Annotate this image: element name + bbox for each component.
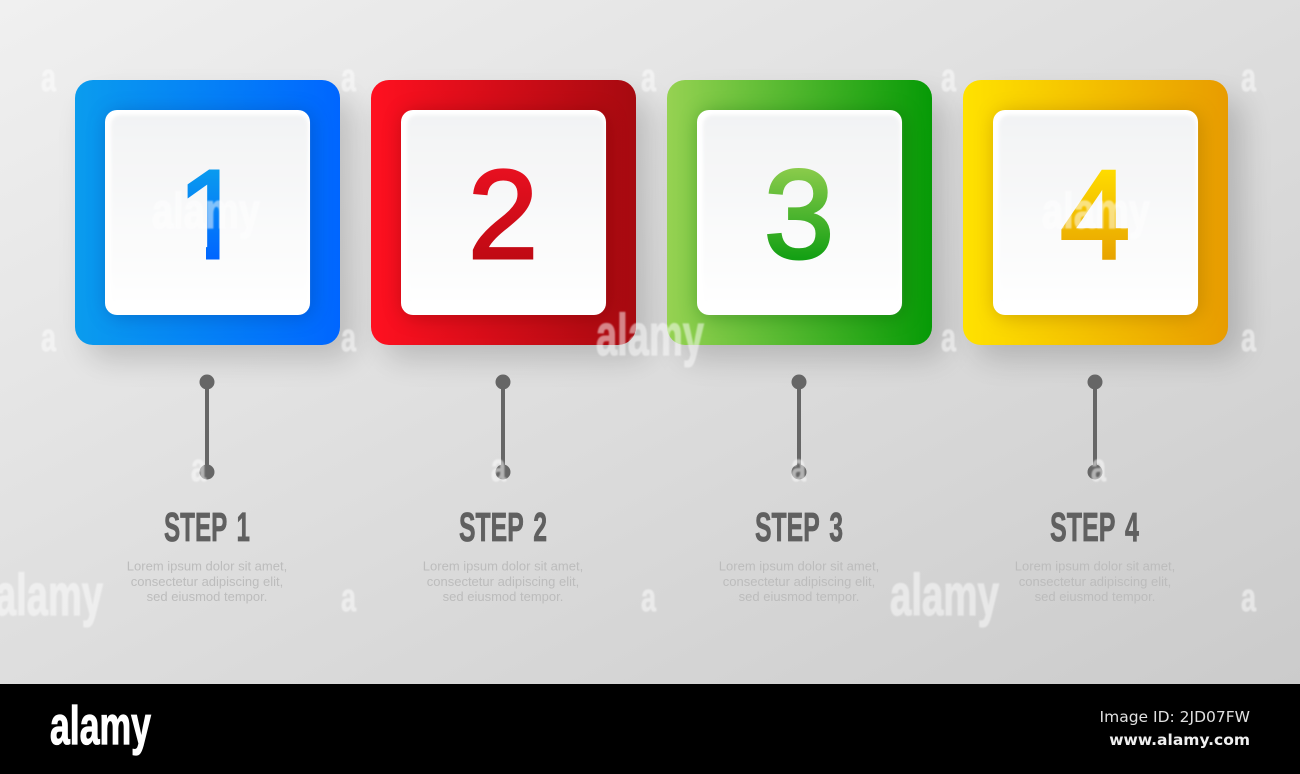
text block: step 4: consectetur adipiscing elit, — [1019, 574, 1171, 589]
footer bar — [0, 684, 1300, 774]
text block: step 4: Lorem ipsum dolor sit amet, — [1015, 558, 1175, 574]
image id: Image ID: 2JD07FW — [1100, 708, 1250, 726]
watermarks: a — [1241, 56, 1257, 100]
number 4: 4 — [1060, 144, 1130, 285]
watermarks: a — [941, 316, 957, 360]
text block: step 1 — [127, 558, 287, 604]
text block: step 1: consectetur adipiscing elit, — [131, 574, 283, 589]
watermarks: a — [641, 576, 657, 620]
watermarks: a — [1241, 316, 1257, 360]
watermarks: a — [341, 56, 357, 100]
watermarks: a — [941, 56, 957, 100]
text block: step 4 — [1015, 558, 1175, 604]
watermarks: a — [791, 446, 807, 490]
heading: step 3: STEP 3 — [755, 504, 843, 550]
text block: step 3: Lorem ipsum dolor sit amet, — [719, 558, 879, 574]
text block: step 1: sed eiusmod tempor. — [147, 589, 267, 604]
connector: step 2 — [496, 374, 510, 480]
watermarks: alamy — [152, 183, 260, 239]
watermarks: a — [641, 56, 657, 100]
text block: step 3 — [719, 558, 879, 604]
watermarks — [0, 56, 1257, 628]
panel: step 3 card — [667, 80, 947, 359]
text block: step 2: consectetur adipiscing elit, — [427, 574, 579, 589]
text block: step 2: sed eiusmod tempor. — [443, 589, 563, 604]
connector: step 3 — [792, 374, 806, 480]
watermarks: alamy — [890, 563, 999, 628]
connector: step 1 — [200, 374, 214, 480]
text block: step 3: sed eiusmod tempor. — [739, 589, 859, 604]
text block: step 2: Lorem ipsum dolor sit amet, — [423, 558, 583, 574]
watermarks: a — [341, 316, 357, 360]
connector: step 4 — [1088, 374, 1102, 480]
watermarks: a — [191, 446, 207, 490]
heading: step 1: STEP 1 — [164, 504, 250, 550]
watermarks: a — [341, 576, 357, 620]
number 3: 3 — [764, 144, 834, 285]
watermarks: a — [491, 446, 507, 490]
footer logo: alamy — [50, 696, 151, 756]
watermarks: a — [1241, 576, 1257, 620]
text block: step 4: sed eiusmod tempor. — [1035, 589, 1155, 604]
website: www.alamy.com — [1109, 731, 1250, 749]
watermarks: alamy — [596, 303, 704, 368]
number 2: 2 — [468, 144, 538, 285]
panel: step 1 card — [75, 80, 355, 359]
text block: step 2 — [423, 558, 583, 604]
text block: step 1: Lorem ipsum dolor sit amet, — [127, 558, 287, 574]
panel: step 4 card — [963, 80, 1243, 359]
watermarks: a — [41, 56, 57, 100]
text block: step 3: consectetur adipiscing elit, — [723, 574, 875, 589]
heading: step 4: STEP 4 — [1050, 504, 1139, 550]
number 1: 1 — [177, 144, 247, 285]
watermarks: a — [41, 316, 57, 360]
panel: step 2 card — [371, 80, 651, 359]
watermarks: a — [1091, 446, 1107, 490]
heading: step 2: STEP 2 — [459, 504, 547, 550]
watermarks: alamy — [1042, 183, 1150, 239]
